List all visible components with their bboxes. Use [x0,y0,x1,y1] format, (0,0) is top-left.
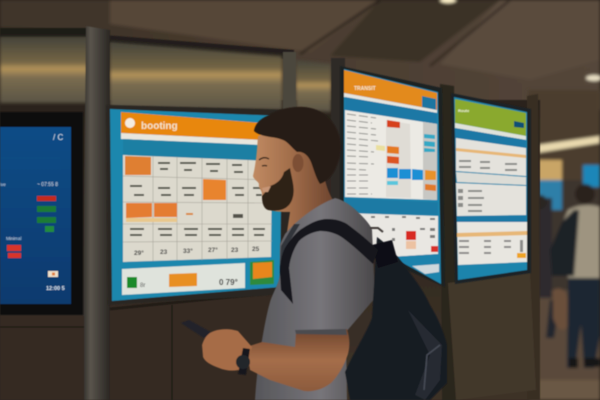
orange header [344,70,437,110]
screen clock icon: / C [53,133,63,142]
blurred traveller [550,184,600,368]
wristwatch [236,348,250,375]
header bar [121,112,262,140]
timetable grid: 27° [208,246,218,254]
ceiling [0,0,600,110]
timetable grid: 25 [252,246,260,253]
orange header: TRANSIT [354,86,376,92]
calendar panel [345,213,438,257]
timetable grid [123,155,272,262]
hand [202,329,252,371]
green header [455,99,526,136]
time rows: 12:00 5 [46,286,65,292]
background concourse with blurred travellers [528,90,600,400]
timetable grid: 23 [160,249,168,256]
schedule tables [456,138,527,265]
green header: Route [458,108,470,113]
time rows: ~ 07:55 8 [37,182,58,188]
time rows: Minimal [6,236,22,241]
beard [262,168,294,211]
panel: left dark-blue screen [0,112,83,315]
traveller [181,107,447,400]
time rows [0,182,65,292]
neck and face [253,125,333,232]
time rows: ive [0,182,6,187]
eye and brow [259,158,269,166]
panel: right green-header screen [451,93,531,284]
bottom info strip: 0 79° [219,278,238,287]
header bar: booting [141,121,178,132]
arm with short sleeve [246,329,349,391]
bottom info strip: 8r [140,283,145,289]
backpack [345,228,447,400]
panel: tall tabular screen [340,66,445,287]
timetable grid: 29° [134,249,144,257]
backpack strap [280,219,378,304]
ear [292,154,304,172]
panel: centre timetable screen [106,105,292,305]
timetable grid: 33° [183,247,193,255]
timetable rows [345,110,437,200]
phone [181,320,214,338]
t-shirt [255,198,375,400]
bottom info strip [122,260,274,295]
timetable grid: 23 [231,247,239,254]
hair [254,107,341,184]
